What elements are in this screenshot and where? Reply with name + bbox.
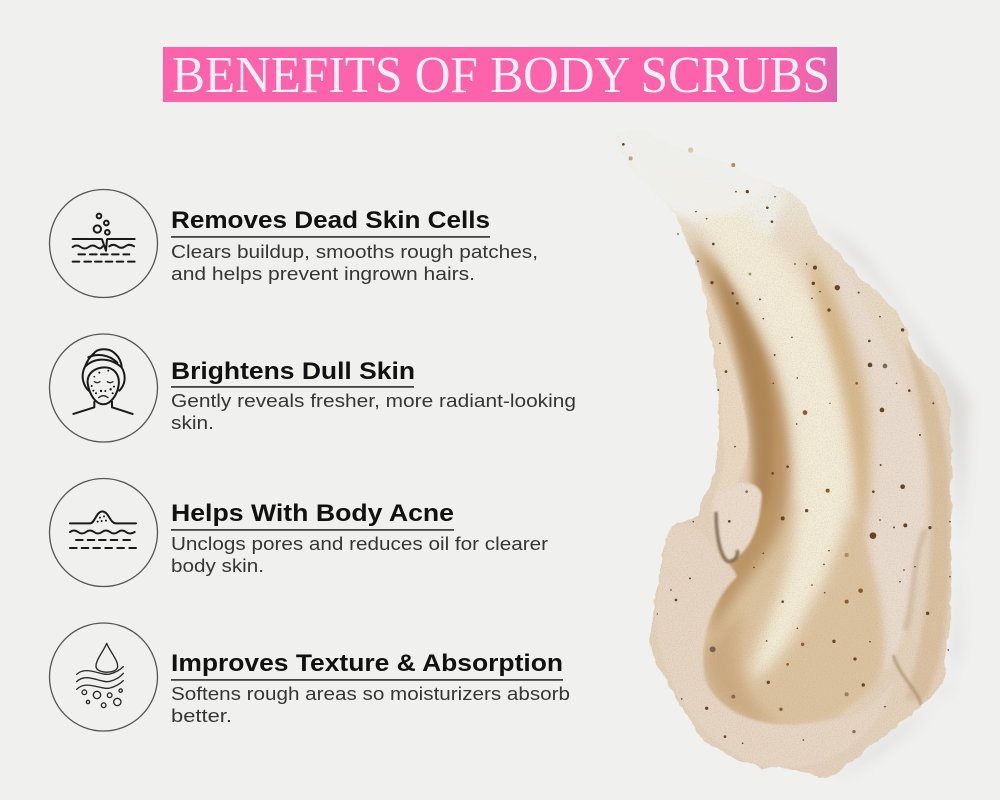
- title text: BENEFITS OF BODY SCRUBS: [172, 47, 830, 104]
- benefit 2: brightens dull skin: [50, 334, 576, 442]
- benefit 1: removes dead skin cells: [50, 190, 538, 298]
- heading: Removes Dead Skin Cells: [171, 207, 490, 234]
- icon: skin layers with exfoliating bubbles: [50, 190, 158, 298]
- speckles, lower scrub: [657, 464, 951, 744]
- bowl: [701, 500, 885, 730]
- heading: Helps With Body Acne: [171, 500, 454, 527]
- icon: face with towel and blemishes: [50, 334, 158, 442]
- body scrub smear: [600, 120, 970, 790]
- description: body skin.: [171, 555, 264, 576]
- description: and helps prevent ingrown hairs.: [171, 263, 475, 284]
- fold crease: [716, 512, 737, 561]
- benefit 4: improves texture and absorption: [50, 623, 570, 731]
- description: [171, 683, 570, 726]
- pink-grey right ridge: [840, 272, 926, 712]
- description: [171, 533, 548, 576]
- description: Clears buildup, smooths rough patches,: [171, 241, 538, 262]
- scrub shadow: [800, 210, 970, 780]
- pale glossy tip: [685, 190, 784, 238]
- heading: Improves Texture & Absorption: [171, 650, 563, 677]
- description: skin.: [171, 412, 214, 433]
- left rim: [700, 278, 749, 472]
- speckles, upper scrub: [622, 143, 934, 447]
- description: Unclogs pores and reduces oil for clearer: [171, 533, 548, 554]
- creamy centre streak: [701, 211, 859, 681]
- title banner: [163, 47, 837, 104]
- description: Softens rough areas so moisturizers absorb: [171, 683, 570, 704]
- right amber band: [806, 245, 870, 540]
- brown streak: [690, 235, 791, 640]
- scrub base: [649, 186, 954, 778]
- heading: Brightens Dull Skin: [171, 358, 415, 385]
- outer right amber rim: [905, 340, 950, 700]
- left lobe: [689, 552, 860, 739]
- description: better.: [171, 705, 232, 726]
- icon: skin with acne bump: [50, 478, 158, 586]
- icon: droplet over waves and bubbles: [50, 623, 158, 731]
- description: Gently reveals fresher, more radiant-looking: [171, 390, 576, 411]
- benefit 3: helps with body acne: [50, 478, 548, 586]
- grain texture: [616, 134, 953, 778]
- description: [171, 390, 576, 433]
- right fold lines: [893, 655, 921, 705]
- bright tip overlay: [616, 129, 771, 218]
- description: [171, 241, 538, 284]
